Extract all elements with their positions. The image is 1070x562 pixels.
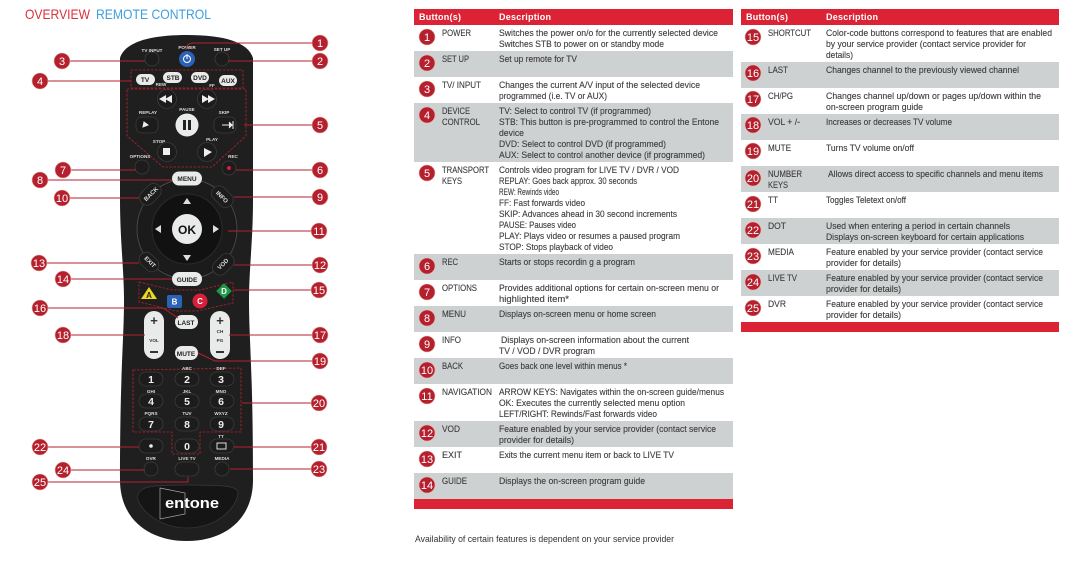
number keys: 5 xyxy=(184,396,190,408)
callout numbers: 8 xyxy=(37,175,43,187)
table: buttons 15 to 25: SHORTCUT xyxy=(768,28,811,38)
device buttons: AUX xyxy=(221,78,236,85)
table: buttons 15 to 25: LIVE TV xyxy=(768,273,798,283)
menu button: MENU xyxy=(177,176,197,183)
title: REMOTE CONTROL xyxy=(96,6,211,22)
volume, channel, last and mute: CH xyxy=(217,329,224,334)
callout lines xyxy=(47,43,312,482)
table: buttons 1 to 14: KEYS xyxy=(442,176,462,186)
callout numbers: 11 xyxy=(313,226,325,238)
table: buttons 1 to 14: Provides additional options for certain on-screen menu or xyxy=(499,283,719,293)
table: buttons 1 to 14: DVD: Select to control DVD (if programmed) xyxy=(499,139,666,149)
transport keys: REW xyxy=(156,82,167,87)
table: buttons 15 to 25: Toggles Teletext on/off xyxy=(826,195,906,205)
table: buttons 1 to 14: Controls video program for LIVE TV / DVR / VOD xyxy=(499,165,679,175)
table: buttons 1 to 14: 10 xyxy=(421,365,433,377)
dvr, live tv and media buttons: MEDIA xyxy=(215,456,230,461)
callout numbers: 13 xyxy=(33,258,45,270)
table: buttons 15 to 25: 21 xyxy=(747,199,759,211)
colour shortcut buttons: A xyxy=(146,291,152,300)
table: buttons 1 to 14: Exits the current menu item or back to LIVE TV xyxy=(499,450,675,460)
table: buttons 1 to 14: EXIT xyxy=(442,450,462,460)
table: buttons 1 to 14: Starts or stops recordin g a program xyxy=(499,257,635,267)
table: buttons 1 to 14: highlighted item* xyxy=(499,294,569,304)
callout numbers: 23 xyxy=(313,464,325,476)
callout numbers: 10 xyxy=(56,193,68,205)
callout numbers: 9 xyxy=(317,192,323,204)
device buttons: TV xyxy=(141,77,150,84)
volume, channel, last and mute: LAST xyxy=(178,320,195,327)
transport keys: SKIP xyxy=(219,110,229,115)
number keys: TT xyxy=(218,434,224,439)
dvr, live tv and media buttons: LIVE TV xyxy=(178,456,197,461)
callout numbers: 20 xyxy=(313,398,325,410)
table: buttons 15 to 25: 19 xyxy=(747,146,759,158)
table: buttons 1 to 14: GUIDE xyxy=(442,476,467,486)
table: buttons 1 to 14: programmed (i.e. TV or AUX) xyxy=(499,91,607,101)
table: buttons 1 to 14: SKIP: Advances ahead in 30 second increments xyxy=(499,209,677,219)
callout numbers: 24 xyxy=(57,465,69,477)
navigation ring: VOD xyxy=(217,258,231,271)
table: buttons 1 to 14: 13 xyxy=(421,454,433,466)
dvr, live tv and media buttons xyxy=(144,456,230,476)
table: buttons 15 to 25: Description xyxy=(826,12,878,22)
colour shortcut buttons: D xyxy=(221,287,227,296)
table: buttons 1 to 14: CONTROL xyxy=(442,117,480,127)
table: buttons 1 to 14: 6 xyxy=(424,261,430,273)
table: buttons 15 to 25: LAST xyxy=(768,65,788,75)
table: buttons 1 to 14: 12 xyxy=(421,428,433,440)
table: buttons 1 to 14: REW: Rewinds video xyxy=(499,187,559,197)
number keys: TUV xyxy=(182,411,193,416)
number keys: 1 xyxy=(148,374,154,386)
number keys: MNO xyxy=(216,389,227,394)
transport keys: PAUSE xyxy=(179,107,195,112)
volume, channel, last and mute xyxy=(144,311,230,360)
table: buttons 1 to 14: TV: Select to control TV (if programmed) xyxy=(499,106,651,116)
table: buttons 1 to 14: Displays on-screen information about the current xyxy=(501,335,689,345)
number keys: JKL xyxy=(183,389,192,394)
table: buttons 1 to 14: 14 xyxy=(421,480,433,492)
navigation ring: GUIDE xyxy=(177,277,198,284)
table: buttons 1 to 14: VOD xyxy=(442,424,460,434)
table: buttons 15 to 25: provider for details) xyxy=(826,284,901,294)
table: buttons 1 to 14: TV/ INPUT xyxy=(442,80,481,90)
table: buttons 1 to 14: LEFT/RIGHT: Rewinds/Fast forwards video xyxy=(499,409,657,419)
table: buttons 1 to 14: 8 xyxy=(424,313,430,325)
callout numbers: 12 xyxy=(314,260,326,272)
table: buttons 15 to 25: Changes channel to the previously viewed channel xyxy=(826,65,1019,75)
table: buttons 15 to 25: 22 xyxy=(747,225,759,237)
table: buttons 1 to 14: PAUSE: Pauses video xyxy=(499,220,576,230)
table: buttons 15 to 25: Feature enabled by your service provider (contact service xyxy=(826,273,1043,283)
table: buttons 15 to 25: Used when entering a period in certain channels xyxy=(826,221,1010,231)
table: buttons 15 to 25: 17 xyxy=(747,94,759,106)
table: buttons 15 to 25: provider for details) xyxy=(826,258,901,268)
number keys: PQRS xyxy=(144,411,158,416)
navigation ring: OK xyxy=(178,223,196,237)
table: buttons 1 to 14: Displays the on-screen program guide xyxy=(499,476,645,486)
table: buttons 15 to 25: Feature enabled by your service provider (contact service xyxy=(826,247,1043,257)
colour shortcut buttons xyxy=(139,282,233,311)
transport keys: STOP xyxy=(153,139,165,144)
volume, channel, last and mute: + xyxy=(150,313,158,328)
table: buttons 15 to 25: on-screen program guide xyxy=(826,102,923,112)
table: buttons 15 to 25: 20 xyxy=(747,173,759,185)
options and rec buttons xyxy=(130,154,239,175)
table: buttons 1 to 14 xyxy=(414,9,733,509)
table: buttons 15 to 25: 15 xyxy=(747,32,759,44)
callout numbers: 18 xyxy=(57,330,69,342)
options and rec buttons: REC xyxy=(228,154,239,159)
callout numbers: 22 xyxy=(34,442,46,454)
transport keys: PLAY xyxy=(206,137,218,142)
table: buttons 1 to 14: Switches the power on/o for the currently selected device xyxy=(499,28,718,38)
table: buttons 1 to 14: Changes the current A/V input of the selected device xyxy=(499,80,700,90)
callout numbers: 5 xyxy=(317,120,323,132)
volume, channel, last and mute: PG xyxy=(217,338,224,343)
table: buttons 15 to 25: MEDIA xyxy=(768,247,795,257)
table: buttons 15 to 25: Allows direct access to specific channels and menu items xyxy=(828,169,1043,179)
table: buttons 1 to 14: Button(s) xyxy=(419,12,461,22)
colour shortcut buttons: C xyxy=(197,297,203,306)
table: buttons 15 to 25: 23 xyxy=(747,251,759,263)
table: buttons 15 to 25: provider for details) xyxy=(826,310,901,320)
table: buttons 1 to 14: POWER xyxy=(442,28,471,38)
table: buttons 15 to 25: Displays on-screen keyboard for certain applications xyxy=(826,232,1024,242)
table: buttons 15 to 25: details) xyxy=(826,50,853,60)
table: buttons 1 to 14: 9 xyxy=(424,339,430,351)
callout numbers: 19 xyxy=(314,356,326,368)
table: buttons 1 to 14: 11 xyxy=(421,391,433,403)
table: buttons 15 to 25: KEYS xyxy=(768,180,788,190)
table: buttons 1 to 14: OPTIONS xyxy=(442,283,477,293)
table: buttons 15 to 25: Button(s) xyxy=(746,12,788,22)
callout numbers: 1 xyxy=(317,38,323,50)
callout numbers: 21 xyxy=(313,442,325,454)
power and setup buttons: TV INPUT xyxy=(142,48,163,53)
table: buttons 15 to 25: DVR xyxy=(768,299,786,309)
table: buttons 15 to 25 xyxy=(741,9,1059,332)
table: buttons 15 to 25: Increases or decreases TV volume xyxy=(826,117,952,127)
table: buttons 1 to 14: DEVICE xyxy=(442,106,470,116)
volume, channel, last and mute: MUTE xyxy=(177,351,196,358)
table: buttons 1 to 14: 7 xyxy=(424,287,430,299)
callout numbers: 16 xyxy=(34,303,46,315)
number keys: 7 xyxy=(148,419,154,431)
navigation ring xyxy=(136,179,237,286)
navigation ring: BACK xyxy=(143,186,160,203)
table: buttons 1 to 14: 1 xyxy=(424,32,430,44)
callout numbers: 4 xyxy=(37,76,43,88)
entone logo: entone xyxy=(165,495,219,512)
table: buttons 1 to 14: Description xyxy=(499,12,551,22)
number keys: 3 xyxy=(218,374,224,386)
number keys: GHI xyxy=(147,389,155,394)
number keys: DEF xyxy=(216,366,226,371)
callout numbers: 25 xyxy=(34,477,46,489)
table: buttons 1 to 14: Feature enabled by your service provider (contact service xyxy=(499,424,716,434)
table: buttons 15 to 25: Feature enabled by your service provider (contact service xyxy=(826,299,1043,309)
table: buttons 15 to 25: MUTE xyxy=(768,143,791,153)
table: buttons 15 to 25: 24 xyxy=(747,277,759,289)
entone logo xyxy=(137,485,238,528)
number keys: ABC xyxy=(182,366,193,371)
callout numbers: 14 xyxy=(57,274,69,286)
options and rec buttons: OPTIONS xyxy=(130,154,150,159)
table: buttons 1 to 14: PLAY: Plays video or resumes a paused program xyxy=(499,231,680,241)
title xyxy=(25,6,211,22)
volume, channel, last and mute: VOL xyxy=(149,338,159,343)
transport keys: REPLAY xyxy=(139,110,157,115)
colour shortcut buttons: B xyxy=(172,298,178,306)
number keys: 8 xyxy=(184,419,190,431)
table: buttons 1 to 14: FF: Fast forwards video xyxy=(499,198,585,208)
table: buttons 1 to 14: SET UP xyxy=(442,54,469,64)
table: buttons 1 to 14: STB: This button is pre-programmed to control the Entone xyxy=(499,117,719,127)
table: buttons 1 to 14: BACK xyxy=(442,361,464,371)
volume, channel, last and mute: + xyxy=(216,313,224,328)
device buttons: DVD xyxy=(193,75,207,82)
table: buttons 1 to 14: Displays on-screen menu or home screen xyxy=(499,309,656,319)
callout numbers: 7 xyxy=(60,165,66,177)
power and setup buttons: SET UP xyxy=(214,47,230,52)
table: buttons 1 to 14: OK: Executes the currently selected menu option xyxy=(499,398,685,408)
footnote: Availability of certain features is dependent on your service provider xyxy=(415,534,674,544)
table: buttons 1 to 14: ARROW KEYS: Navigates within the on-screen guide/menus xyxy=(499,387,724,397)
table: buttons 15 to 25: 18 xyxy=(747,120,759,132)
table: buttons 1 to 14: TV / VOD / DVR program xyxy=(499,346,595,356)
number keys: 9 xyxy=(218,419,224,431)
navigation ring: EXIT xyxy=(142,256,156,270)
transport keys: FF xyxy=(209,83,215,88)
table: buttons 15 to 25: Turns TV volume on/off xyxy=(826,143,914,153)
number keys: 2 xyxy=(184,374,190,386)
device buttons: STB xyxy=(166,75,180,82)
table: buttons 1 to 14: REC xyxy=(442,257,458,267)
table: buttons 15 to 25: VOL + /- xyxy=(768,117,800,127)
table: buttons 1 to 14: 4 xyxy=(424,110,430,122)
title: OVERVIEW xyxy=(25,6,91,22)
number keys: 0 xyxy=(184,441,190,453)
table: buttons 1 to 14: AUX: Select to control another device (if programmed) xyxy=(499,150,705,160)
table: buttons 15 to 25: Color-code buttons correspond to features that are enabled xyxy=(826,28,1052,38)
dvr, live tv and media buttons: DVR xyxy=(146,456,157,461)
table: buttons 1 to 14: TRANSPORT xyxy=(442,165,489,175)
transport keys xyxy=(127,82,246,167)
table: buttons 1 to 14: INFO xyxy=(442,335,461,345)
table: buttons 15 to 25: NUMBER xyxy=(768,169,802,179)
table: buttons 15 to 25: Changes channel up/down or pages up/down within the xyxy=(826,91,1041,101)
callout numbers: 3 xyxy=(59,56,65,68)
table: buttons 15 to 25: CH/PG xyxy=(768,91,793,101)
number keys: WXYZ xyxy=(214,411,228,416)
table: buttons 15 to 25: DOT xyxy=(768,221,786,231)
table: buttons 1 to 14: device xyxy=(499,128,524,138)
table: buttons 15 to 25: TT xyxy=(768,195,778,205)
table: buttons 1 to 14: MENU xyxy=(442,309,466,319)
table: buttons 1 to 14: 2 xyxy=(424,58,430,70)
power and setup buttons xyxy=(142,45,230,67)
table: buttons 1 to 14: NAVIGATION xyxy=(442,387,492,397)
device buttons xyxy=(131,70,243,88)
table: buttons 15 to 25: by your service provider (contact service provider for xyxy=(826,39,1026,49)
callout numbers: 17 xyxy=(314,330,326,342)
callout numbers: 2 xyxy=(317,56,323,68)
power and setup buttons: POWER xyxy=(178,45,196,50)
number keys: 4 xyxy=(148,396,154,408)
table: buttons 1 to 14: Switches STB to power on or standby mode xyxy=(499,39,664,49)
callout numbers: 6 xyxy=(317,165,323,177)
navigation ring: INFO xyxy=(214,191,229,205)
callout numbers: 15 xyxy=(313,285,325,297)
table: buttons 1 to 14: REPLAY: Goes back approx. 30 seconds xyxy=(499,176,637,186)
remote control xyxy=(120,35,253,541)
table: buttons 15 to 25: 16 xyxy=(747,68,759,80)
number keys: 6 xyxy=(218,396,224,408)
menu button xyxy=(172,172,202,186)
table: buttons 15 to 25: 25 xyxy=(747,303,759,315)
table: buttons 1 to 14: STOP: Stops playback of video xyxy=(499,242,613,252)
table: buttons 1 to 14: 3 xyxy=(424,84,430,96)
number keys xyxy=(133,366,241,454)
table: buttons 1 to 14: provider for details) xyxy=(499,435,574,445)
table: buttons 1 to 14: Set up remote for TV xyxy=(499,54,578,64)
table: buttons 1 to 14: Goes back one level within menus * xyxy=(499,361,627,371)
table: buttons 1 to 14: 5 xyxy=(424,168,430,180)
remote body xyxy=(120,35,253,541)
callout numbers xyxy=(31,35,328,490)
